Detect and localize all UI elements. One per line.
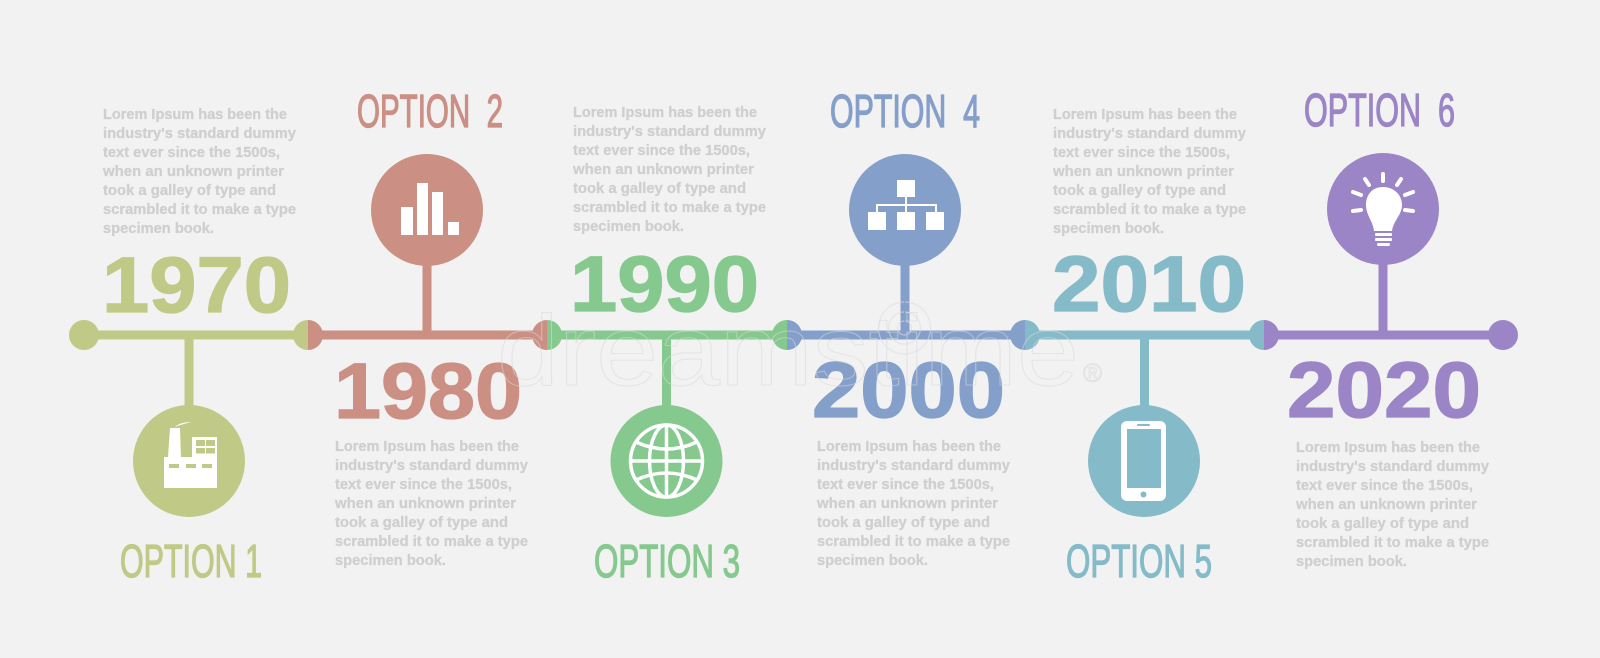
- year 2020: 2020: [1287, 345, 1481, 434]
- text block 2010: when an unknown printer: [1052, 164, 1234, 180]
- text block 2010: specimen book.: [1053, 221, 1164, 237]
- stem 3: [662, 335, 671, 415]
- panel: 2000: [812, 85, 1010, 569]
- text block 1990: industry's standard dummy: [573, 124, 766, 140]
- text block 2020: industry's standard dummy: [1296, 459, 1489, 475]
- watermark: ®: [1083, 358, 1102, 388]
- year 1980: 1980: [334, 346, 522, 435]
- panel: 1990: [570, 105, 766, 587]
- year 2000: 2000: [812, 345, 1005, 434]
- panel: 1970: [102, 107, 296, 587]
- text block 2000: [816, 439, 1010, 569]
- text block 1970: Lorem Ipsum has been the: [103, 107, 287, 123]
- icon: globe: [610, 405, 722, 517]
- text block 1990: took a galley of type and: [573, 181, 746, 197]
- heading: option 3: OPTION 3: [594, 535, 740, 587]
- text block 2010: industry's standard dummy: [1053, 126, 1246, 142]
- panel: 1980: [334, 85, 528, 569]
- heading: option 2: OPTION 2: [357, 85, 503, 137]
- stem 1: [184, 335, 194, 415]
- watermark: dreamstime: [497, 295, 1079, 407]
- year 1990: 1990: [570, 239, 759, 328]
- text block 2010: [1052, 107, 1246, 237]
- text block 1990: Lorem Ipsum has been the: [573, 105, 757, 121]
- text block 2010: took a galley of type and: [1053, 183, 1226, 199]
- text block 2020: Lorem Ipsum has been the: [1296, 440, 1480, 456]
- text block 2020: scrambled it to make a type: [1296, 535, 1489, 551]
- text block 1970: when an unknown printer: [102, 164, 284, 180]
- text block 1970: specimen book.: [103, 221, 214, 237]
- icon: org chart: [849, 154, 961, 266]
- text block 2000: Lorem Ipsum has been the: [817, 439, 1001, 455]
- text block 2010: text ever since the 1500s,: [1053, 145, 1230, 161]
- text block 1980: when an unknown printer: [334, 496, 516, 512]
- text block 1990: [572, 105, 766, 235]
- icon: smartphone: [1088, 405, 1200, 517]
- heading: option 6: OPTION 6: [1304, 84, 1455, 136]
- text block 1970: text ever since the 1500s,: [103, 145, 280, 161]
- text block 1980: text ever since the 1500s,: [335, 477, 512, 493]
- panel: 2020: [1287, 84, 1489, 570]
- text block 2020: specimen book.: [1296, 554, 1407, 570]
- panel: 2010: [1052, 107, 1246, 587]
- year 2010: 2010: [1052, 239, 1246, 328]
- text block 1990: when an unknown printer: [572, 162, 754, 178]
- text block 1990: text ever since the 1500s,: [573, 143, 750, 159]
- text block 1980: [334, 439, 528, 569]
- text block 1970: scrambled it to make a type: [103, 202, 296, 218]
- text block 2000: scrambled it to make a type: [817, 534, 1010, 550]
- text block 1970: took a galley of type and: [103, 183, 276, 199]
- text block 2020: when an unknown printer: [1295, 497, 1477, 513]
- heading: option 1: OPTION 1: [120, 535, 262, 587]
- text block 1970: industry's standard dummy: [103, 126, 296, 142]
- icon: light bulb: [1327, 153, 1439, 265]
- icon: factory: [133, 405, 245, 517]
- text block 1970: [102, 107, 296, 237]
- text block 2020: [1295, 440, 1489, 570]
- text block 1980: took a galley of type and: [335, 515, 508, 531]
- stem 2: [422, 262, 432, 332]
- text block 2000: specimen book.: [817, 553, 928, 569]
- year 1970: 1970: [102, 240, 291, 329]
- text block 1990: specimen book.: [573, 219, 684, 235]
- heading: option 5: OPTION 5: [1066, 535, 1212, 587]
- stem 6: [1378, 262, 1388, 332]
- text block 2010: scrambled it to make a type: [1053, 202, 1246, 218]
- icon: bar chart: [371, 154, 483, 266]
- text block 2000: text ever since the 1500s,: [817, 477, 994, 493]
- text block 1990: scrambled it to make a type: [573, 200, 766, 216]
- text block 1980: scrambled it to make a type: [335, 534, 528, 550]
- timeline axis: [69, 320, 1518, 350]
- text block 1980: Lorem Ipsum has been the: [335, 439, 519, 455]
- text block 2020: took a galley of type and: [1296, 516, 1469, 532]
- text block 1980: specimen book.: [335, 553, 446, 569]
- text block 2000: when an unknown printer: [816, 496, 998, 512]
- text block 2000: took a galley of type and: [817, 515, 990, 531]
- heading: option 4: OPTION 4: [830, 85, 980, 137]
- stem 5: [1140, 335, 1149, 415]
- text block 1980: industry's standard dummy: [335, 458, 528, 474]
- text block 2010: Lorem Ipsum has been the: [1053, 107, 1237, 123]
- text block 2000: industry's standard dummy: [817, 458, 1010, 474]
- text block 2020: text ever since the 1500s,: [1296, 478, 1473, 494]
- stem 4: [900, 262, 910, 332]
